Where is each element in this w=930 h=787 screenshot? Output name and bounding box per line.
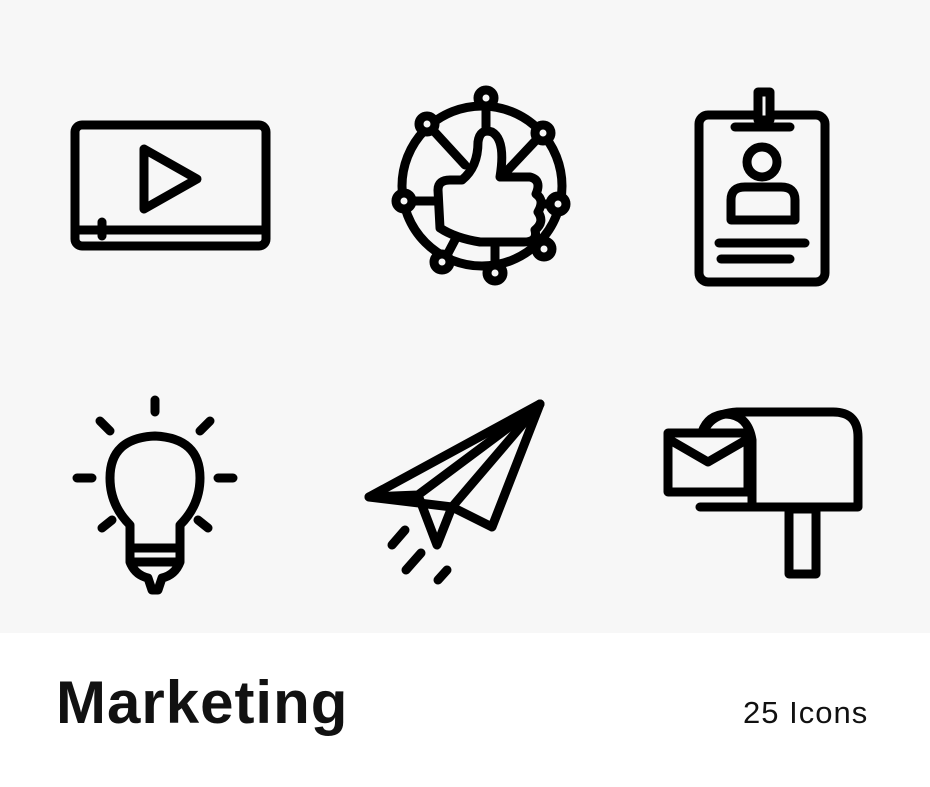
icon: ID badge <box>699 92 825 282</box>
title: Marketing <box>56 669 348 736</box>
icon: social like network <box>396 90 566 281</box>
icon: paper airplane <box>369 404 540 580</box>
icon: light bulb <box>77 400 233 590</box>
icon: mailbox with letter <box>668 412 858 574</box>
text: icon count: 25 Icons <box>743 695 868 730</box>
icon: video player <box>75 125 266 246</box>
